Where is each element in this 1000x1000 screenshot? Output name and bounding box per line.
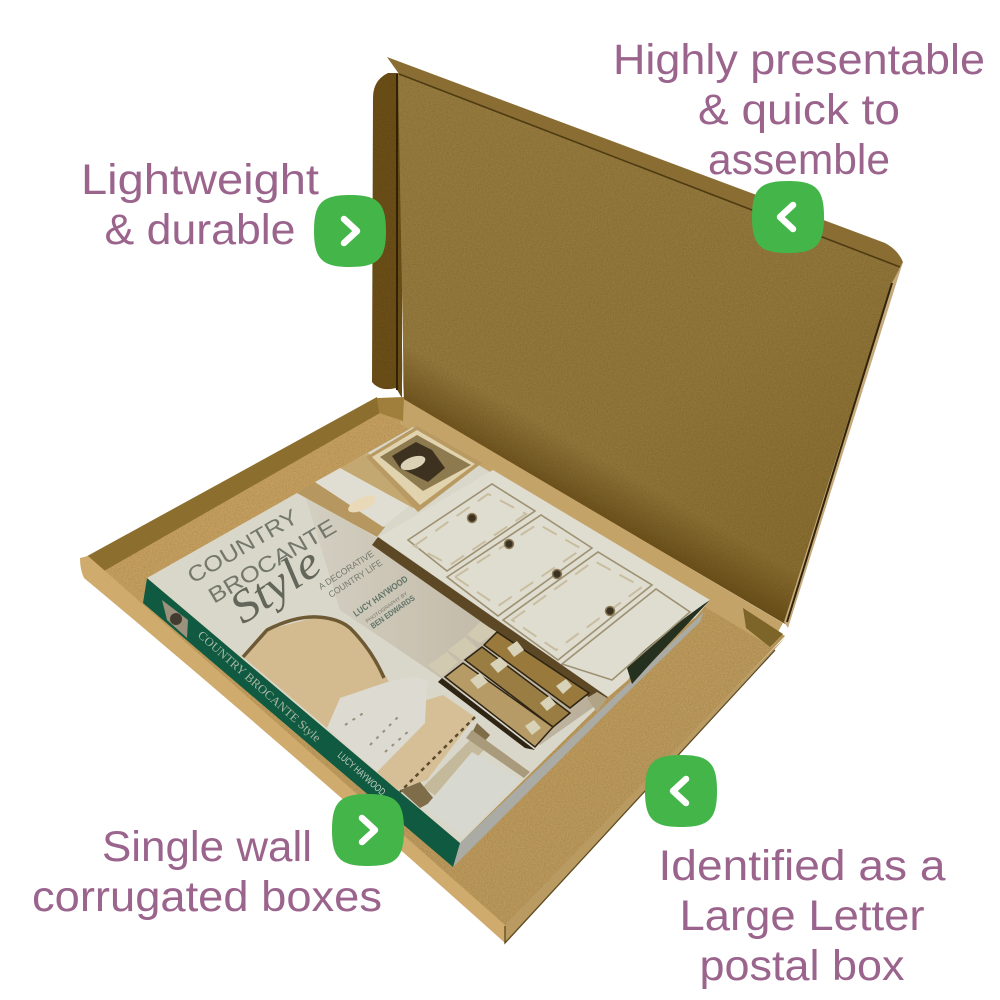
lid right crease: [787, 283, 892, 622]
lower white panel: [425, 752, 520, 837]
button: right chevron, corrugated: [332, 794, 404, 866]
lid right edge: [784, 262, 903, 628]
chair frame strip: [423, 735, 487, 797]
chair ornaments: [400, 723, 490, 808]
spine title: COUNTRY BROCANTE Style: [195, 628, 324, 745]
label: single wall corrugated: corrugated boxes: [32, 873, 382, 921]
flap shadow fold: [627, 600, 710, 684]
base front-right wall: [505, 638, 785, 943]
subtitle: A DECORATIVE: [317, 548, 376, 592]
small tan square: [587, 692, 607, 712]
upper rail: [340, 453, 425, 508]
seat cushion: [377, 695, 475, 790]
seat dotted edge: [400, 717, 475, 792]
spine author: LUCY HAYWOOD: [335, 750, 387, 798]
base front-left wall: [80, 556, 505, 943]
spine ornament: [162, 600, 188, 638]
subtitle line two: COUNTRY LIFE: [327, 558, 384, 600]
book two: [465, 647, 570, 727]
author: LUCY HAYWOOD: [351, 573, 410, 619]
drawer fronts: [408, 484, 690, 680]
cabinet shadow: [372, 537, 608, 705]
lid hinge shadow: [398, 267, 900, 625]
drawer inner ornaments: [414, 494, 642, 650]
lid top flap: [387, 57, 903, 268]
Style script: Style: [220, 536, 330, 633]
book: [143, 426, 710, 867]
box base: [80, 397, 785, 943]
base floor: [100, 412, 785, 928]
label: highly presentable: & quick to: [698, 86, 900, 134]
button: right chevron, lightweight: [314, 195, 386, 267]
label: lightweight and durable: Lightweight: [81, 156, 319, 204]
book spine: [143, 578, 460, 867]
label: single wall corrugated: Single wall: [102, 823, 312, 871]
base back wall: [80, 397, 380, 571]
back corner fold: [377, 397, 404, 421]
lid left side flap: [372, 73, 402, 398]
cabinet drawers flap: [372, 470, 710, 705]
label: lightweight and durable: & durable: [104, 206, 296, 254]
wall colour: [305, 495, 608, 745]
shadow below stacked books: [438, 678, 535, 750]
chair: [243, 617, 490, 808]
framed photo figures: [392, 442, 445, 482]
wall panel above rail: [315, 468, 413, 527]
book three: [484, 632, 589, 708]
book cover background: [147, 427, 710, 843]
label: large letter postal box: Large Letter: [680, 892, 924, 940]
cloth lace marks: [345, 712, 410, 752]
lid top crease: [399, 74, 900, 267]
book pages: [428, 622, 497, 677]
photographer: PHOTOGRAPHY BY: [365, 591, 410, 625]
drawer knobs: [468, 514, 614, 616]
label: large letter postal box: Identified as a: [658, 842, 946, 890]
lid left crease: [396, 74, 398, 390]
box lid, open: [372, 57, 903, 628]
lid inner panel: [398, 73, 900, 625]
chair back: [243, 617, 390, 728]
COUNTRY: COUNTRY: [183, 504, 303, 588]
hinge corner tab: [743, 608, 783, 647]
label: highly presentable: assemble: [708, 136, 890, 184]
stacked books on cover: [428, 622, 607, 750]
label: highly presentable: Highly presentable: [613, 36, 985, 84]
rail under frame: [297, 482, 385, 537]
button: left chevron, presentable: [752, 181, 824, 253]
BROCANTE: BROCANTE: [204, 514, 341, 608]
book labels: [470, 641, 572, 735]
picture frame: [366, 426, 482, 512]
book page block: [453, 612, 704, 867]
label: large letter postal box: postal box: [700, 942, 905, 990]
lace ornament: [346, 492, 378, 516]
white cloth: [327, 677, 427, 772]
chair rail: [466, 730, 530, 778]
cover title: [183, 504, 417, 633]
photographer name: BEN EDWARDS: [369, 593, 417, 631]
button: left chevron, postal: [645, 755, 717, 827]
cardboard box: [80, 57, 903, 943]
hinge strip: [400, 398, 783, 646]
book one: [445, 663, 553, 747]
